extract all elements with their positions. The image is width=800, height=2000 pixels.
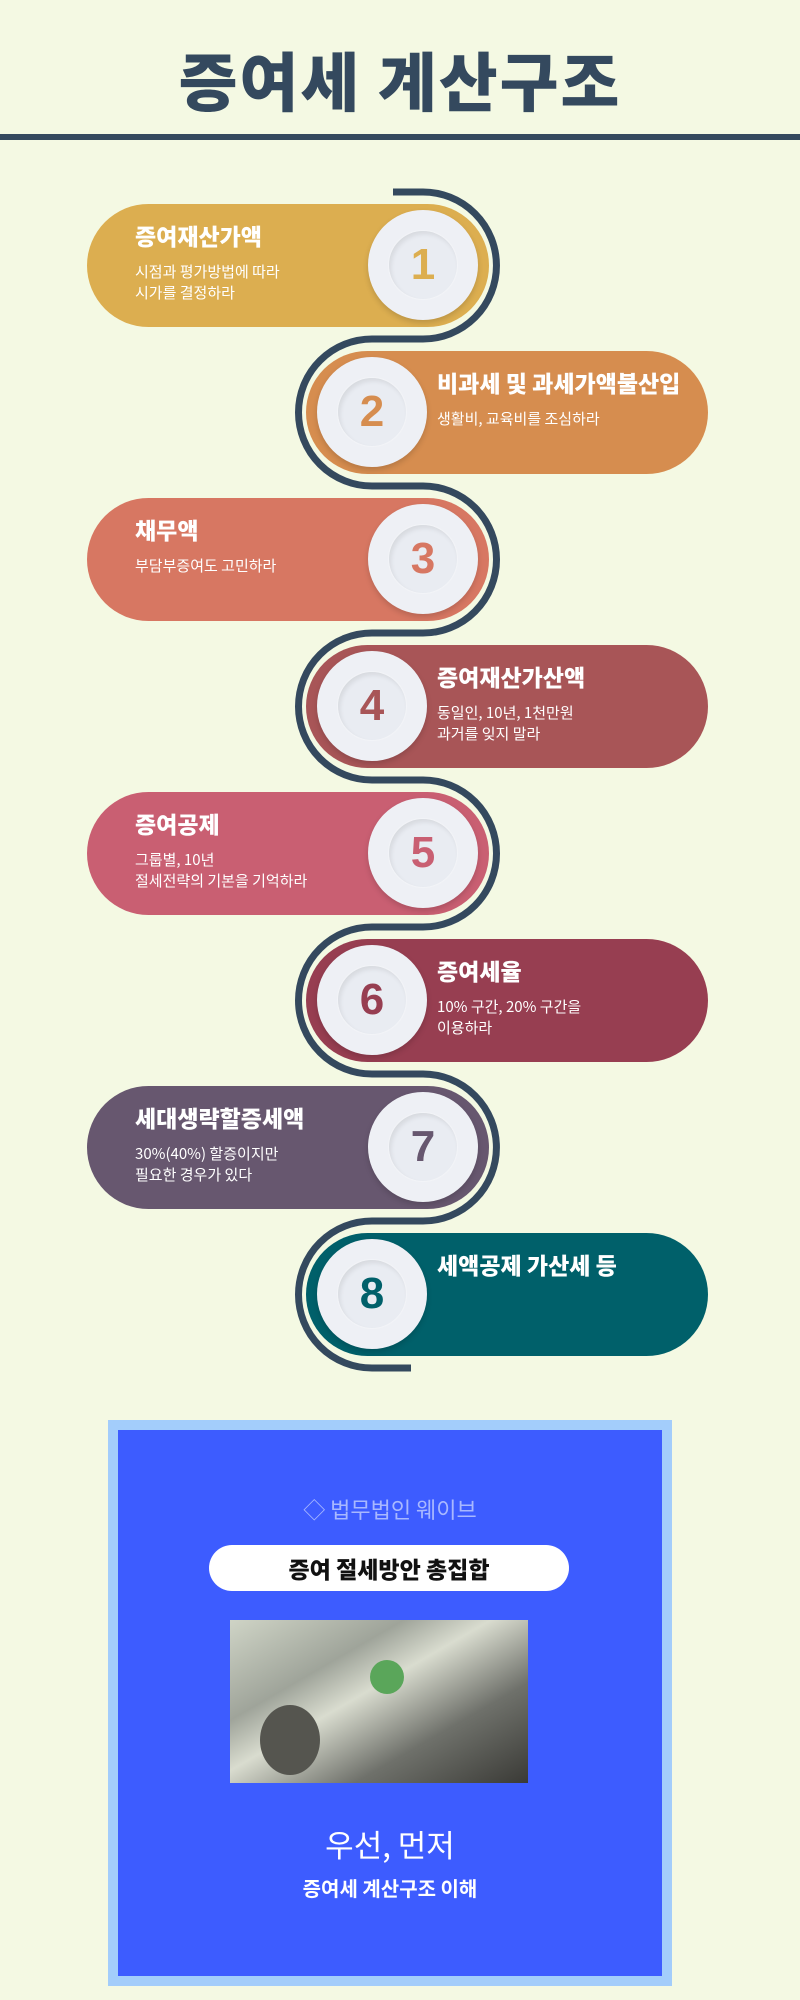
panel: promo	[108, 1420, 672, 1986]
serpentine line	[295, 188, 500, 1372]
step 5: 절세전략의 기본을 기억하라	[135, 870, 307, 891]
caption: 증여세 계산구조 이해	[303, 1873, 477, 1902]
step 1: 증여재산가액	[135, 218, 262, 252]
step 6: 증여세율	[437, 953, 522, 987]
step 4: 4	[360, 681, 384, 730]
step 4: 동일인, 10년, 1천만원	[437, 702, 574, 723]
step 6: 6	[360, 975, 384, 1024]
headline pill	[209, 1545, 569, 1591]
step 4	[306, 645, 708, 768]
step 2	[306, 351, 708, 474]
step 1: 시가를 결정하라	[135, 282, 235, 303]
headline pill: 증여 절세방안 총집합	[288, 1551, 489, 1585]
step 1: 1	[411, 240, 435, 289]
step 7	[87, 1086, 489, 1209]
step 8	[306, 1233, 708, 1356]
step 5: 증여공제	[135, 806, 220, 840]
step 3: 채무액	[135, 512, 198, 546]
step 6: 이용하라	[437, 1017, 492, 1038]
step 1: 시점과 평가방법에 따라	[135, 261, 280, 282]
step 4: 과거를 잊지 말라	[437, 723, 540, 744]
step 7: 세대생략할증세액	[135, 1100, 304, 1134]
step 1	[87, 204, 489, 327]
step 8: 세액공제 가산세 등	[437, 1247, 617, 1281]
subtitle: 우선, 먼저	[325, 1821, 455, 1866]
title: 증여세 계산구조	[179, 33, 621, 125]
step 3: 부담부증여도 고민하라	[135, 555, 276, 576]
step 6: 10% 구간, 20% 구간을	[437, 996, 581, 1017]
step 7: 필요한 경우가 있다	[135, 1164, 252, 1185]
step 5: 그룹별, 10년	[135, 849, 214, 870]
step 3: 3	[411, 534, 435, 583]
step 2: 생활비, 교육비를 조심하라	[437, 408, 600, 429]
step 8: 8	[360, 1269, 384, 1318]
step 3	[87, 498, 489, 621]
step 6	[306, 939, 708, 1062]
step 7: 7	[411, 1122, 435, 1171]
step 4: 증여재산가산액	[437, 659, 585, 693]
step 5	[87, 792, 489, 915]
step 2: 비과세 및 과세가액불산입	[437, 365, 680, 399]
step 5: 5	[411, 828, 435, 877]
image: money	[230, 1620, 528, 1783]
step 7: 30%(40%) 할증이지만	[135, 1143, 278, 1164]
step 2: 2	[360, 387, 384, 436]
logo: ◇ 법무법인 웨이브	[303, 1493, 477, 1525]
